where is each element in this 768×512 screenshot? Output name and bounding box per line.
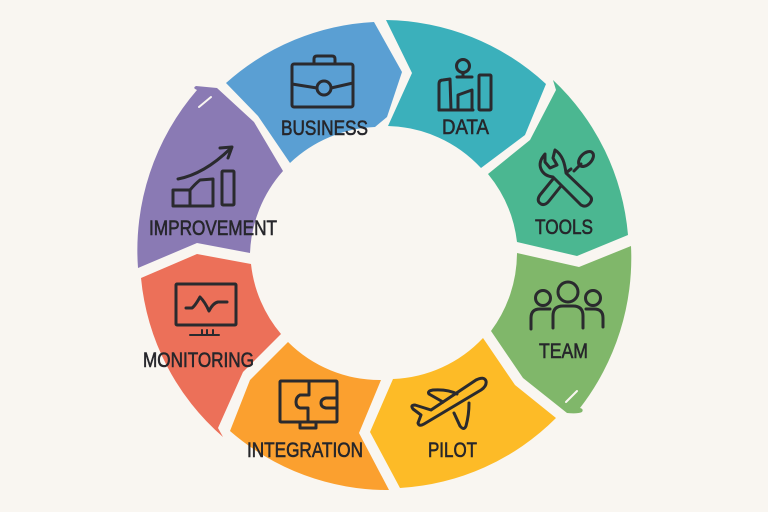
label: business: BUSINESS xyxy=(281,117,368,140)
segment: data xyxy=(386,20,546,168)
segment: team xyxy=(491,246,631,413)
icon: growth chart with arrow xyxy=(173,147,234,206)
label: integration: INTEGRATION xyxy=(247,439,363,462)
icon: puzzle monitor xyxy=(280,381,337,428)
label: monitoring: MONITORING xyxy=(143,349,254,372)
label: tools: TOOLS xyxy=(535,216,593,239)
icon: monitor with waveform xyxy=(176,284,236,335)
highlight: team xyxy=(566,391,577,402)
highlight: improvement xyxy=(199,97,211,107)
icon: briefcase xyxy=(292,56,353,107)
icon: airplane xyxy=(412,378,486,428)
icon: wrench and screwdriver xyxy=(538,149,596,206)
label: team: TEAM xyxy=(539,340,588,363)
label: data: DATA xyxy=(442,116,489,139)
segment: tools xyxy=(488,80,628,256)
segment: integration xyxy=(230,342,389,490)
label: pilot: PILOT xyxy=(428,439,477,462)
segment: monitoring xyxy=(141,254,281,437)
segment: business xyxy=(226,22,402,163)
segment: improvement xyxy=(137,86,283,268)
label: improvement: IMPROVEMENT xyxy=(149,217,277,240)
icon: three people xyxy=(531,282,603,329)
segment: pilot xyxy=(370,338,556,488)
icon: bar chart with pin xyxy=(439,60,491,110)
